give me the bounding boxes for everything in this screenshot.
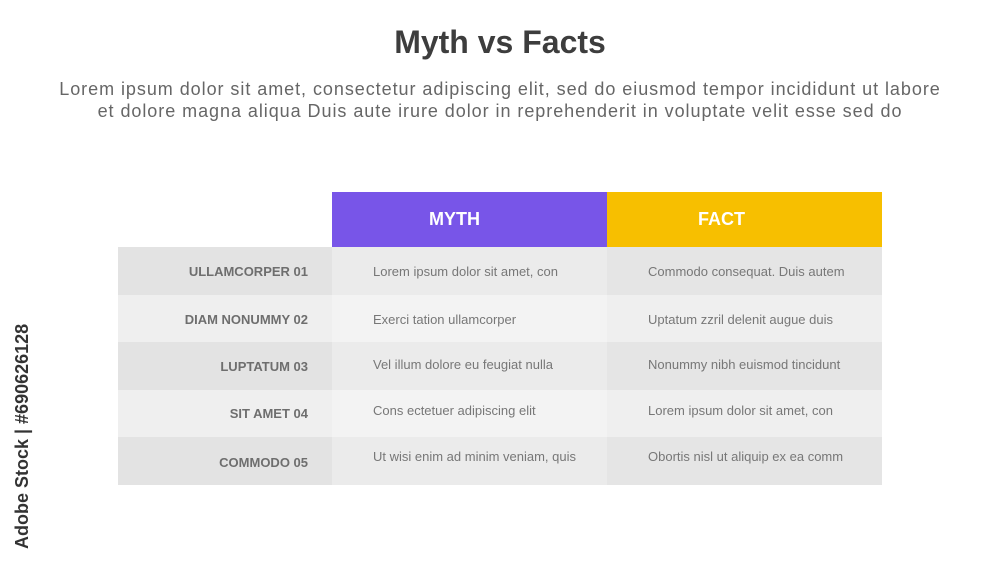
title: Myth vs Facts <box>394 24 606 60</box>
row 4: SIT AMET 04 <box>230 406 308 421</box>
row 2: Exerci tation ullamcorper <box>373 312 516 327</box>
row 2: Uptatum zzril delenit augue duis <box>648 312 833 327</box>
row 2: DIAM NONUMMY 02 <box>185 312 308 327</box>
row 5: Ut wisi enim ad minim veniam, quis <box>373 449 576 464</box>
header: myth: MYTH <box>429 209 480 229</box>
row 1: Lorem ipsum dolor sit amet, con <box>373 264 558 279</box>
header: myth <box>332 192 607 247</box>
row 3: Vel illum dolore eu feugiat nulla <box>373 357 553 372</box>
subtitle text: et dolore magna aliqua Duis aute irure dolor in reprehenderit in voluptate velit esse sed do <box>98 101 902 121</box>
subtitle text <box>59 79 941 121</box>
row 1: ULLAMCORPER 01 <box>189 264 308 279</box>
row 4 <box>230 403 833 421</box>
row 3: Nonummy nibh euismod tincidunt <box>648 357 840 372</box>
header: fact <box>607 192 882 247</box>
watermark id vertical: Adobe Stock | #690626128 <box>12 324 32 549</box>
row 1: Commodo consequat. Duis autem <box>648 264 845 279</box>
row 5 <box>219 449 843 470</box>
row backgrounds <box>118 247 882 485</box>
row 4: Cons ectetuer adipiscing elit <box>373 403 536 418</box>
row 2 <box>185 312 833 327</box>
row 1 <box>189 264 845 279</box>
row 3: LUPTATUM 03 <box>220 359 308 374</box>
row 3 <box>220 357 840 374</box>
row 5: Obortis nisl ut aliquip ex ea comm <box>648 449 843 464</box>
row 5: COMMODO 05 <box>219 455 308 470</box>
header: fact: FACT <box>698 209 745 229</box>
row 4: Lorem ipsum dolor sit amet, con <box>648 403 833 418</box>
subtitle text: Lorem ipsum dolor sit amet, consectetur adipiscing elit, sed do eiusmod tempor incididunt ut labore <box>59 79 941 99</box>
